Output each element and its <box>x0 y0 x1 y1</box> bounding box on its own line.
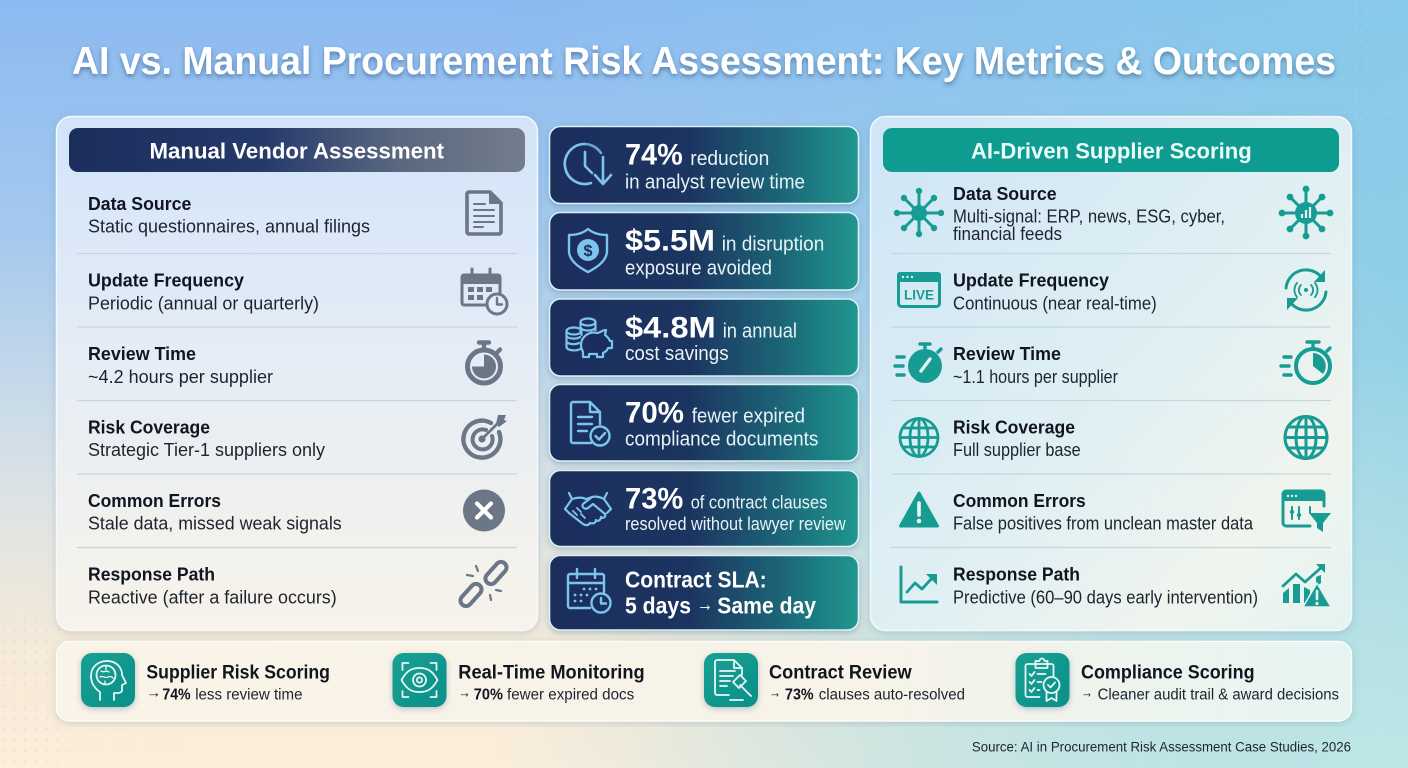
use case: supplier risk scoring: Supplier Risk Scoring <box>146 661 330 683</box>
card: $4.8M savings: $4.8M <box>625 311 716 344</box>
panel: ai-driven supplier scoring <box>870 116 1352 630</box>
icon: fast stopwatch solid <box>895 344 942 383</box>
use case: compliance scoring: Cleaner audit trail & award decisions <box>1098 686 1339 703</box>
manual: update frequency: Update Frequency <box>88 270 245 291</box>
manual: review time <box>88 343 273 387</box>
ai panel heading: AI-Driven Supplier Scoring <box>971 139 1252 164</box>
use case: contract review <box>704 653 965 707</box>
use case: real-time monitoring: → <box>458 684 471 702</box>
use case: supplier risk scoring: 74% <box>162 686 191 703</box>
icon: fast stopwatch outline <box>1281 342 1330 383</box>
icon: checklist with badge <box>1016 653 1070 707</box>
ai: update frequency: Continuous (near real-time) <box>953 293 1157 313</box>
ai panel heading <box>883 128 1339 172</box>
ai: data source <box>953 183 1225 244</box>
panel: key metric cards <box>550 126 858 630</box>
use case: compliance scoring: Compliance Scoring <box>1081 661 1255 683</box>
card: $4.8M savings: cost savings <box>625 343 729 365</box>
icon: shield with dollar: $ <box>584 243 593 260</box>
use case: real-time monitoring: Real-Time Monitoring <box>458 661 645 683</box>
source note: Source: AI in Procurement Risk Assessment Case Studies, 2026 <box>972 740 1351 756</box>
card: $4.8M savings: in annual <box>723 320 797 342</box>
icon: eye in scanner frame <box>392 653 446 707</box>
icon: calendar with clock outline <box>568 569 610 612</box>
manual: response path: Response Path <box>88 564 215 585</box>
ai: data source: Multi-signal: ERP, news, ESG, cyber, <box>953 207 1225 227</box>
icon: broken link <box>458 560 509 608</box>
use case: contract review: Contract Review <box>769 661 912 683</box>
card: contract sla: Same day <box>717 592 816 618</box>
title: AI vs. Manual Procurement Risk Assessment: Key Metrics & Outcomes <box>72 40 1336 83</box>
use case: supplier risk scoring: → <box>146 684 161 702</box>
card: contract sla: Contract SLA: <box>625 566 767 592</box>
card: 73% contract clauses: 73% <box>625 482 683 515</box>
icon: live window: LIVE <box>904 288 934 302</box>
ai: review time: ~1.1 hours per supplier <box>953 367 1118 387</box>
icon: clock with down arrow <box>565 144 611 184</box>
manual panel heading: Manual Vendor Assessment <box>150 139 445 164</box>
ai: update frequency: Update Frequency <box>953 270 1110 291</box>
ai: common errors <box>953 490 1254 534</box>
icon: globe <box>900 418 938 456</box>
ai: risk coverage: Risk Coverage <box>953 416 1075 437</box>
ai: response path <box>953 564 1258 607</box>
card: $5.5M disruption <box>550 212 858 290</box>
ai: response path: Predictive (60–90 days early intervention) <box>953 587 1258 607</box>
card: 70% fewer expired: 70% <box>625 396 684 429</box>
manual: common errors: Common Errors <box>88 490 221 511</box>
icon: live window <box>897 272 941 306</box>
icon: contract with gavel <box>704 653 758 707</box>
manual: update frequency: Periodic (annual or quarterly) <box>88 293 319 313</box>
card: 70% fewer expired <box>550 384 858 461</box>
icon: document with check <box>571 402 610 446</box>
card: 74% reduction <box>550 126 858 204</box>
manual: risk coverage: Risk Coverage <box>88 416 210 437</box>
use case: contract review: → <box>769 684 781 702</box>
icon: warning triangle <box>900 493 938 526</box>
ai: common errors: False positives from unclean master data <box>953 514 1254 534</box>
use case: compliance scoring <box>1016 653 1339 707</box>
use case: compliance scoring: → <box>1081 684 1093 702</box>
card: 70% fewer expired: fewer expired <box>692 405 805 427</box>
manual: review time: ~4.2 hours per supplier <box>88 367 273 387</box>
icon: data hub with bars <box>1279 186 1333 239</box>
icon: shield with dollar <box>569 229 607 272</box>
use case: real-time monitoring: fewer expired docs <box>507 686 634 703</box>
card: 73% contract clauses: resolved without lawyer review <box>625 513 846 534</box>
use case: real-time monitoring <box>392 653 645 707</box>
icon: document <box>467 192 501 234</box>
ai: risk coverage: Full supplier base <box>953 440 1081 460</box>
icon: coins and piggy bank <box>566 318 612 357</box>
manual: common errors: Stale data, missed weak signals <box>88 514 342 534</box>
card: $5.5M disruption: $5.5M <box>625 225 715 258</box>
icon: continuous sync signal <box>1286 270 1326 310</box>
manual: data source: Static questionnaires, annual filings <box>88 217 370 237</box>
icon: x circle <box>463 490 505 532</box>
manual: risk coverage <box>88 416 325 460</box>
card: 74% reduction: in analyst review time <box>625 171 805 193</box>
icon: calendar with clock <box>462 269 507 314</box>
manual: data source: Data Source <box>88 193 191 214</box>
card: contract sla: 5 days <box>625 592 691 618</box>
icon: growth chart with warning <box>1283 564 1331 607</box>
card: $5.5M disruption: in disruption <box>722 234 824 256</box>
card: 74% reduction: 74% <box>625 138 683 171</box>
manual: response path: Reactive (after a failure occurs) <box>88 587 337 607</box>
icon: stopwatch <box>468 342 500 383</box>
icon: data hub <box>894 188 944 237</box>
manual: data source <box>88 193 370 237</box>
manual: response path <box>88 564 337 607</box>
icon: line chart <box>901 567 937 602</box>
manual panel heading <box>69 128 525 172</box>
card: $5.5M disruption: exposure avoided <box>625 257 772 279</box>
manual: review time: Review Time <box>88 343 196 364</box>
ai: review time: Review Time <box>953 343 1061 364</box>
card: 73% contract clauses: of contract clauses <box>691 491 827 512</box>
icon: brain in head <box>81 653 135 707</box>
ai: common errors: Common Errors <box>953 490 1086 511</box>
panel: manual vendor assessment <box>56 116 538 630</box>
ai: response path: Response Path <box>953 564 1080 585</box>
ai: update frequency <box>953 270 1157 313</box>
icon: handshake <box>565 493 611 525</box>
icon: target <box>463 415 507 458</box>
ai: data source: Data Source <box>953 183 1057 204</box>
card: 73% contract clauses <box>550 470 858 546</box>
card: 74% reduction: reduction <box>690 148 769 170</box>
use case: real-time monitoring: 70% <box>474 686 503 703</box>
manual: update frequency <box>88 270 319 313</box>
panel: use case strip <box>56 642 1352 721</box>
ai: data source: financial feeds <box>953 224 1062 244</box>
use case: contract review: 73% <box>785 686 814 703</box>
card: 70% fewer expired: compliance documents <box>625 429 818 451</box>
card: $4.8M savings <box>550 299 858 376</box>
use case: supplier risk scoring <box>81 653 330 707</box>
use case: contract review: clauses auto-resolved <box>819 686 965 703</box>
icon: globe large <box>1285 416 1327 458</box>
ai: risk coverage <box>953 416 1081 460</box>
use case: supplier risk scoring: less review time <box>195 686 302 703</box>
card: contract sla: → <box>697 594 713 616</box>
card: contract sla <box>550 556 858 630</box>
manual: risk coverage: Strategic Tier-1 suppliers only <box>88 440 325 460</box>
manual: common errors <box>88 490 342 534</box>
ai: review time <box>953 343 1118 387</box>
icon: dashboard with filter <box>1283 491 1331 532</box>
